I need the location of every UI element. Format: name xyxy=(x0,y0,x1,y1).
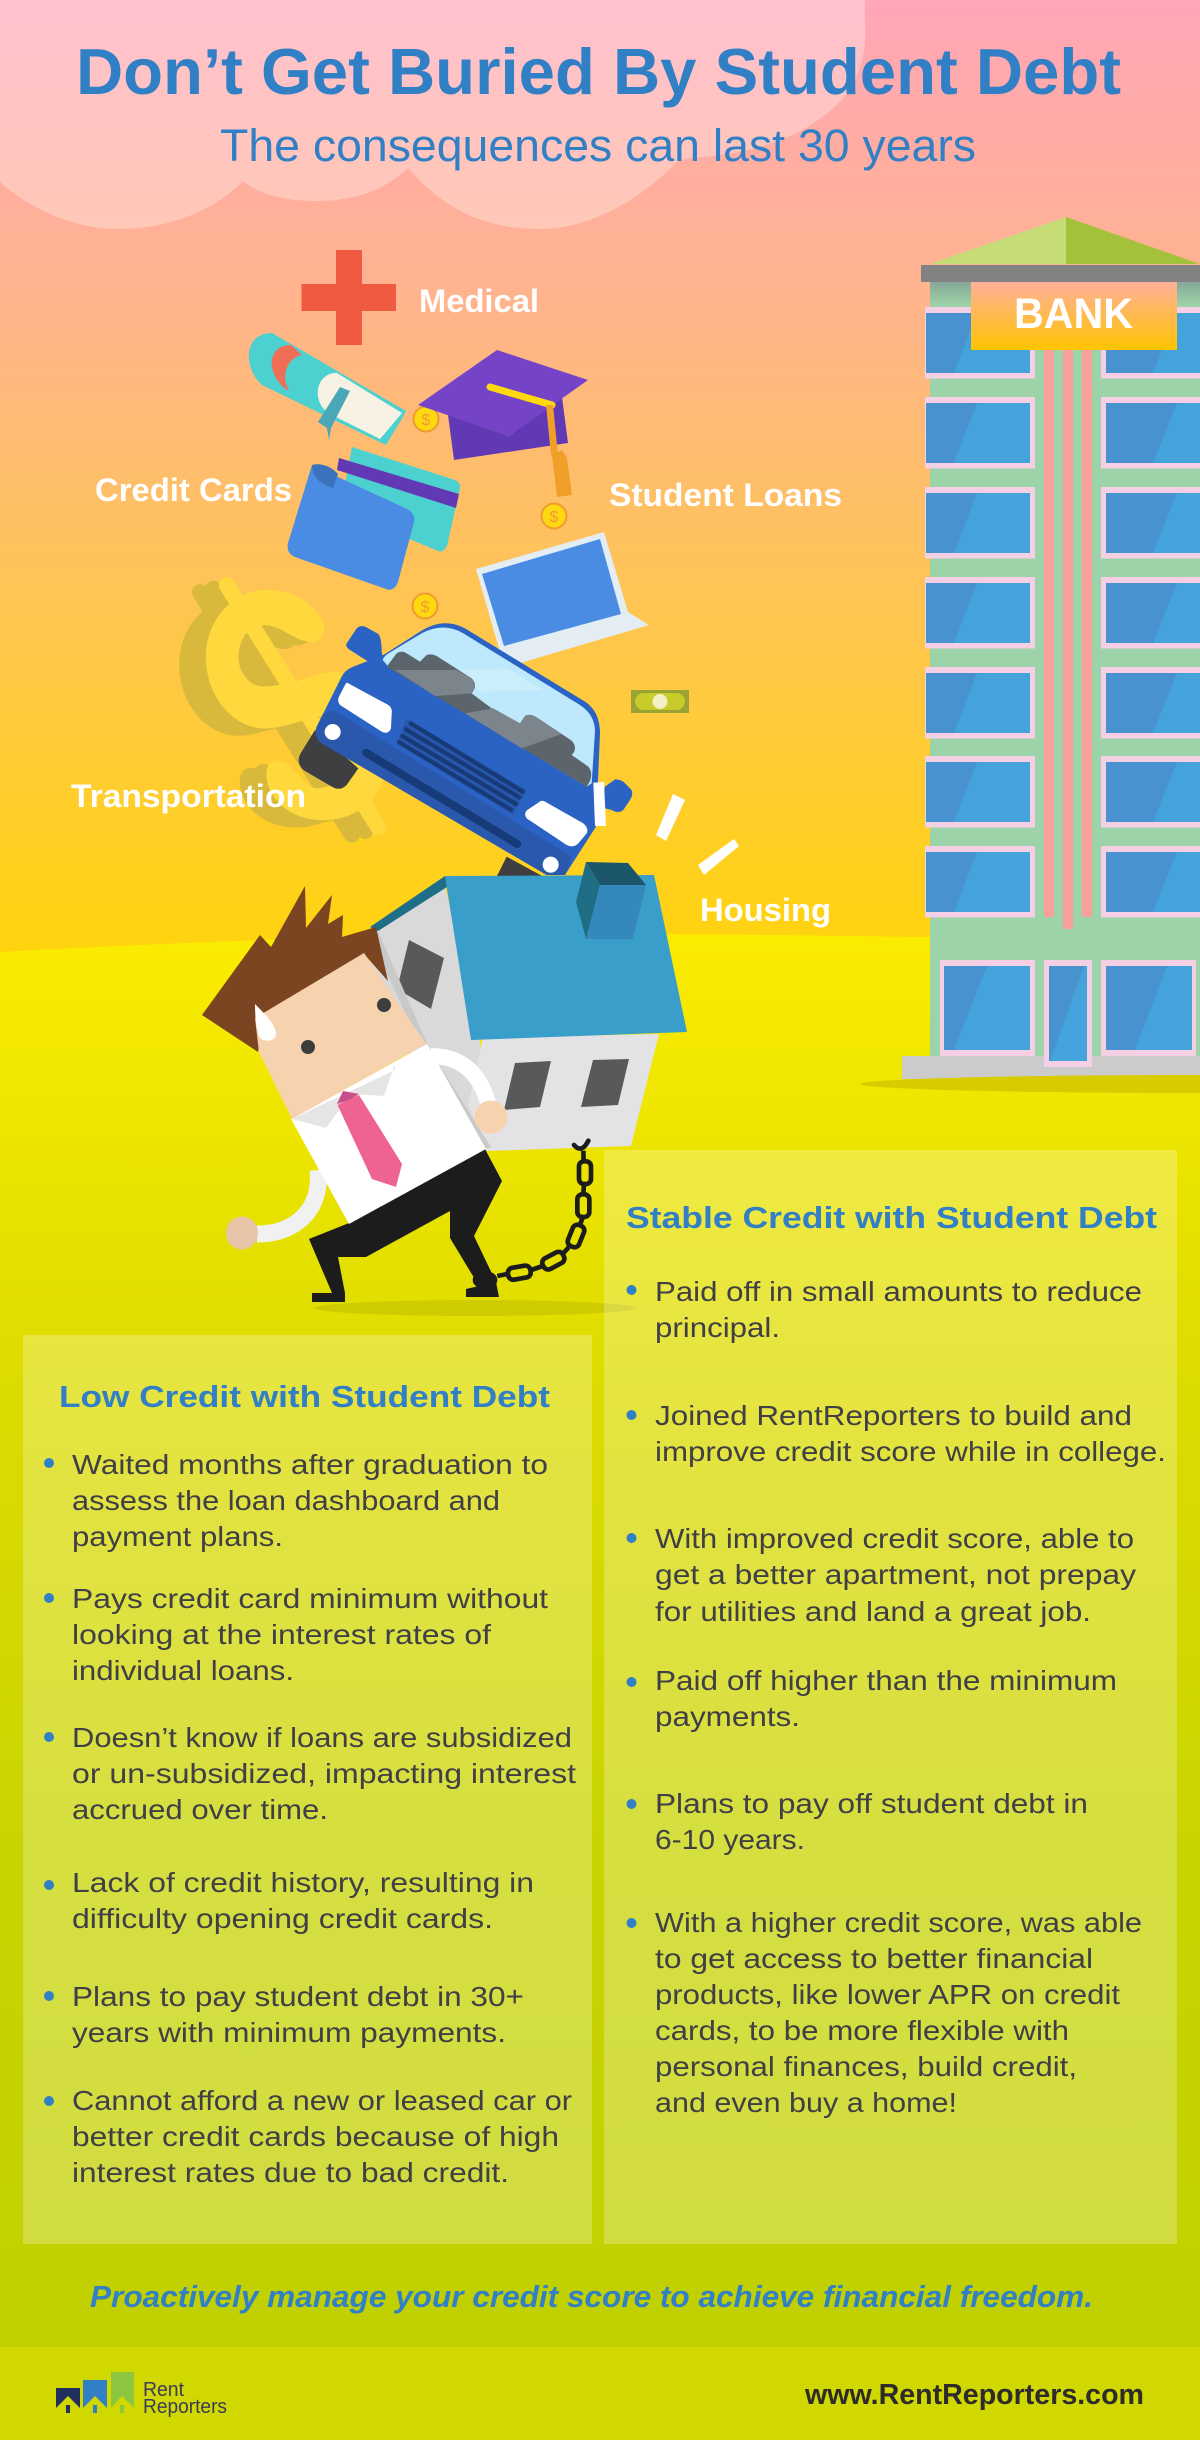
house chimney xyxy=(576,862,646,939)
shadow line between man and house xyxy=(374,931,491,1149)
bullet item 1: assess the loan dashboard and xyxy=(72,1485,500,1516)
bullet item 5 xyxy=(44,1981,524,2048)
bank lower windows and door xyxy=(940,960,1196,1067)
panel: stable credit with student debt xyxy=(604,1150,1177,2244)
bullet item 4: Lack of credit history, resulting in xyxy=(72,1867,534,1898)
sky background xyxy=(0,0,1200,960)
bullet item 2: individual loans. xyxy=(72,1655,294,1686)
house front wall xyxy=(468,1034,659,1151)
man shirt xyxy=(291,1044,486,1224)
heading: stable credit: Stable Credit with Student Debt xyxy=(626,1200,1157,1235)
label: transportation: Transportation xyxy=(71,778,306,814)
bullet item 6 xyxy=(44,2085,572,2188)
car headlights xyxy=(338,683,587,846)
cloud xyxy=(0,0,865,229)
bank sign xyxy=(971,282,1177,350)
icon: chain xyxy=(475,1141,591,1287)
car vent xyxy=(366,753,517,844)
character: man carrying debt xyxy=(202,886,508,1302)
icon: wallet with cards xyxy=(288,447,460,590)
man trousers xyxy=(309,1149,502,1302)
bullet item 3 xyxy=(626,1523,1136,1627)
man hair xyxy=(202,886,388,1052)
car windshield xyxy=(383,627,595,787)
bullet item 2 xyxy=(44,1583,548,1686)
bullet item 3: get a better apartment, not prepay xyxy=(655,1559,1136,1590)
bank base xyxy=(902,1056,1200,1079)
ground shadow under man xyxy=(314,1300,636,1316)
bullet item 3 xyxy=(44,1722,576,1825)
bullet item 6: interest rates due to bad credit. xyxy=(72,2157,509,2188)
title: Don’t Get Buried By Student Debt xyxy=(76,35,1121,108)
bullet item 3: Doesn’t know if loans are subsidized xyxy=(72,1722,572,1753)
icon: coin: $ xyxy=(422,412,431,429)
bullet item 5: Plans to pay student debt in 30+ xyxy=(72,1981,524,2012)
logo text: Rent xyxy=(143,2379,184,2401)
man left arm xyxy=(226,1170,318,1250)
bullet item 3: accrued over time. xyxy=(72,1794,328,1825)
icon: coin: $ xyxy=(421,599,430,616)
impact mark on car xyxy=(593,782,606,826)
bank roof xyxy=(930,217,1200,264)
bullet item 3: With improved credit score, able to xyxy=(655,1523,1134,1554)
man collar shading xyxy=(292,1064,395,1128)
man eyes xyxy=(301,998,391,1054)
bullet item 1: principal. xyxy=(655,1312,780,1343)
logo text: Reporters xyxy=(143,2396,227,2418)
label: housing: Housing xyxy=(700,892,831,928)
bullet item 2: looking at the interest rates of xyxy=(72,1619,491,1650)
car fog lights xyxy=(325,724,559,873)
bullet item 5 xyxy=(626,1788,1088,1855)
icon: dollar bill xyxy=(631,690,689,713)
house gable wall xyxy=(360,885,487,1151)
wall shadow xyxy=(930,282,1200,306)
bullet item 4: payments. xyxy=(655,1701,800,1732)
icon: coin xyxy=(412,594,438,618)
icon: coin: $ xyxy=(550,509,559,526)
bullet item 2: improve credit score while in college. xyxy=(655,1436,1166,1467)
panel: low credit with student debt xyxy=(23,1335,592,2244)
bullet item 3: for utilities and land a great job. xyxy=(655,1596,1091,1627)
bank pink stripes xyxy=(1044,350,1092,929)
bullet item 4 xyxy=(44,1867,534,1934)
bullet item 2 xyxy=(626,1400,1166,1467)
bank cornice xyxy=(921,265,1200,282)
bank building xyxy=(902,217,1200,1079)
icon: graduation cap xyxy=(418,350,588,497)
car grille xyxy=(397,718,527,815)
label: student loans: Student Loans xyxy=(609,477,842,513)
bullet item 6: to get access to better financial xyxy=(655,1943,1093,1974)
impact line xyxy=(698,839,739,875)
bullet item 1 xyxy=(44,1449,548,1552)
bullet item 5: Plans to pay off student debt in xyxy=(655,1788,1088,1819)
bullet item 6: With a higher credit score, was able xyxy=(655,1907,1142,1938)
car wheels xyxy=(299,730,543,877)
bank sign: BANK xyxy=(1014,290,1133,338)
ground hill xyxy=(0,934,1200,2350)
car body xyxy=(316,623,600,875)
car seats xyxy=(387,652,591,787)
bullet item 6 xyxy=(626,1907,1142,2118)
footer band xyxy=(0,2347,1200,2440)
bullet item 3: or un-subsidized, impacting interest xyxy=(72,1758,576,1789)
icon: coin xyxy=(542,504,566,528)
heading: low credit: Low Credit with Student Debt xyxy=(59,1379,550,1414)
icon: falling car xyxy=(299,623,632,877)
icon: house xyxy=(360,862,687,1151)
car bumper xyxy=(316,710,572,875)
man sweat drop xyxy=(255,1004,276,1041)
bullet item 5: years with minimum payments. xyxy=(72,2017,506,2048)
icon: laptop xyxy=(476,532,649,664)
bullet item 4 xyxy=(626,1665,1117,1732)
car mirrors xyxy=(346,626,632,812)
icon: diploma book xyxy=(249,333,406,445)
subtitle: The consequences can last 30 years xyxy=(220,120,976,171)
website url: www.RentReporters.com xyxy=(804,2379,1144,2411)
icon: medical cross xyxy=(302,250,396,345)
bullet item 4: Paid off higher than the minimum xyxy=(655,1665,1117,1696)
bullet item 6: products, like lower APR on credit xyxy=(655,1979,1120,2010)
bullet item 6: Cannot afford a new or leased car or xyxy=(72,2085,572,2116)
man face xyxy=(255,953,426,1119)
icon: dollar sign xyxy=(179,585,387,835)
windshield glare xyxy=(455,668,543,692)
label: medical: Medical xyxy=(419,283,539,319)
bank wall xyxy=(930,265,1200,1057)
man right arm xyxy=(431,1056,508,1134)
bullet item 2: Joined RentReporters to build and xyxy=(655,1400,1132,1431)
logo bars xyxy=(56,2372,134,2413)
bullet item 6: cards, to be more flexible with xyxy=(655,2015,1069,2046)
bullet item 1 xyxy=(626,1276,1142,1343)
logo text xyxy=(143,2379,227,2418)
logo: Rent Reporters xyxy=(56,2372,227,2418)
bullet item 1: Waited months after graduation to xyxy=(72,1449,548,1480)
icon: coin xyxy=(414,406,438,432)
bullet item 6: and even buy a home! xyxy=(655,2087,957,2118)
bullet item 6: personal finances, build credit, xyxy=(655,2051,1077,2082)
bank ground shadow xyxy=(860,1075,1200,1093)
house roof edge xyxy=(370,876,447,931)
bullet item 4: difficulty opening credit cards. xyxy=(72,1903,493,1934)
bullet item 6: better credit cards because of high xyxy=(72,2121,559,2152)
impact line xyxy=(656,794,685,841)
house windows xyxy=(397,940,629,1110)
bullet item 1: payment plans. xyxy=(72,1521,283,1552)
label: credit cards: Credit Cards xyxy=(95,472,292,508)
tagline: Proactively manage your credit score to achieve financial freedom. xyxy=(90,2279,1093,2314)
house roof xyxy=(445,875,687,1040)
bullet item 2: Pays credit card minimum without xyxy=(72,1583,548,1614)
man tie xyxy=(337,1091,402,1187)
bank upper windows xyxy=(925,307,1200,918)
bullet item 1: Paid off in small amounts to reduce xyxy=(655,1276,1142,1307)
bullet item 5: 6-10 years. xyxy=(655,1824,805,1855)
